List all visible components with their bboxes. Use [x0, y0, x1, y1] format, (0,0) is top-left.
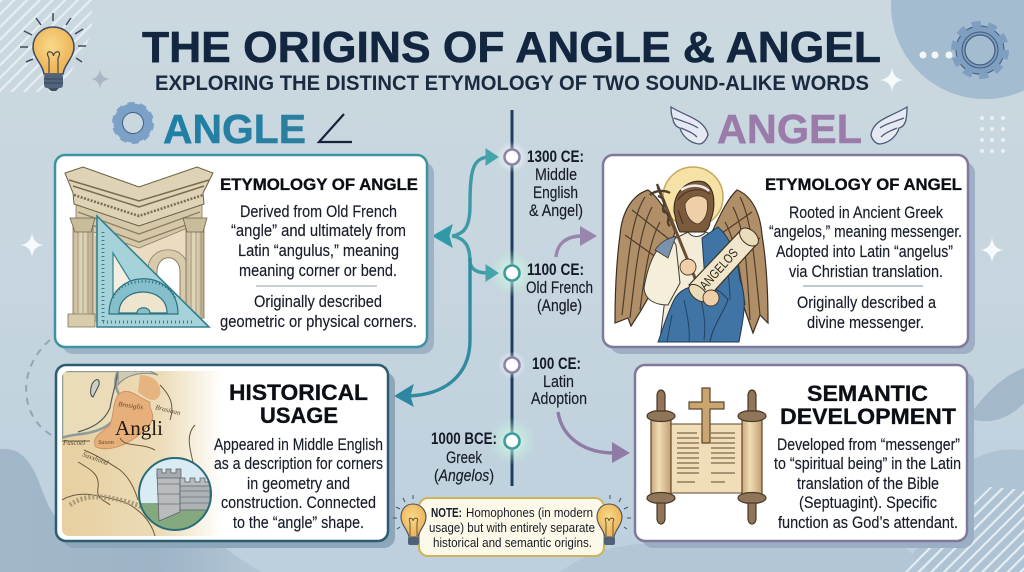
illustration: old map of Angli — [62, 371, 222, 536]
heading: historical usage: USAGE — [260, 403, 338, 428]
title: THE ORIGINS OF ANGLE & ANGEL — [142, 23, 881, 72]
icon: left note bulb — [393, 495, 426, 545]
icon: light bulb top left — [20, 13, 86, 91]
timeline label: 1300 CE: Middle — [535, 166, 577, 184]
text: historical description: construction. Connected — [221, 494, 376, 512]
text: historical description — [214, 436, 383, 532]
arrows: teal branch from timeline to angle cards — [395, 149, 498, 406]
arrow: purple to angel etymology card — [556, 226, 597, 257]
illustration: set square and protractor — [97, 216, 209, 327]
text: semantic description: Developed from “messenger” — [777, 436, 960, 454]
timeline label: 1300 CE: 1300 CE: — [527, 148, 584, 166]
note text: Homophones (in modern — [466, 506, 593, 520]
illustration: angel with scroll — [615, 167, 768, 342]
text: historical description: as a description for corners — [214, 455, 383, 473]
text: historical description: in geometry and — [247, 475, 350, 493]
timeline label: 1100 CE: (Angle) — [537, 297, 582, 315]
text: semantic description: function as God’s attendant. — [778, 514, 958, 532]
text: angel description: “angelos,” meaning messenger. — [769, 223, 962, 241]
text: angle description: geometric or physical corners. — [220, 313, 417, 331]
text: semantic description: to “spiritual being” in the Latin — [774, 455, 961, 473]
heading: semantic development — [780, 381, 957, 429]
note text: NOTE: — [431, 506, 462, 520]
text: angel description: Rooted in Ancient Greek — [789, 204, 944, 222]
heading: historical usage — [229, 380, 368, 428]
node: 100 CE — [498, 351, 526, 379]
text: historical description: Appeared in Middle English — [214, 436, 383, 454]
timeline label: 1100 CE: 1100 CE: — [527, 261, 584, 279]
text: angle description: Derived from Old French — [240, 203, 397, 221]
note text: usage) but with entirely separate — [429, 521, 595, 535]
node: 1100 CE — [488, 249, 536, 297]
timeline label: 1000 BCE — [431, 430, 497, 485]
panel: historical usage — [56, 365, 395, 548]
text: semantic description — [774, 436, 961, 532]
illustration: old map of Angli: Brosiglis — [118, 400, 144, 412]
text: historical description: to the “angle” shape. — [233, 514, 364, 532]
illustration: old map of Angli: Saxon — [98, 439, 114, 446]
arrow: purple to semantic development card — [558, 412, 630, 463]
heading: etymology of angel: ETYMOLOGY OF ANGEL — [765, 175, 962, 194]
icon: angle symbol — [319, 114, 352, 142]
timeline label: 100 CE: Latin — [543, 373, 574, 391]
text: semantic description: (Septuagint). Specific — [799, 494, 937, 512]
text: angel description: Adopted into Latin “angelus” — [776, 243, 953, 261]
icon: right note bulb — [597, 495, 631, 545]
text: angel description: divine messenger. — [807, 314, 924, 332]
note text: historical and semantic origins. — [433, 536, 592, 550]
label: Angli: Angli — [115, 416, 163, 440]
decorative dots beside gear — [920, 52, 952, 58]
text: angle description: Originally described — [254, 293, 382, 311]
illustration: classical temple corner — [65, 167, 213, 327]
text: angle description — [220, 203, 417, 331]
icon: blue gear by angle heading — [114, 104, 152, 142]
timeline — [488, 110, 536, 486]
text: angle description: Latin “angulus,” meaning — [238, 242, 399, 260]
node: 1300 CE — [496, 141, 528, 173]
timeline label: 1000 BCE: 1000 BCE: — [431, 430, 497, 448]
icon: left wing — [671, 107, 708, 144]
heading: semantic development: SEMANTIC — [807, 381, 928, 406]
timeline label: 1000 BCE: Greek — [446, 449, 483, 467]
text: angel description: via Christian translation. — [789, 263, 943, 281]
timeline label: 1000 BCE: (Angelos) — [434, 467, 494, 485]
text: angel description: Originally described a — [797, 294, 937, 312]
note text — [429, 506, 595, 550]
text: angel description — [769, 204, 962, 332]
timeline label: 1300 CE: & Angel) — [529, 202, 583, 220]
timeline label: 1100 CE — [526, 261, 593, 315]
heading: ANGEL: ANGEL — [717, 106, 862, 152]
timeline label: 1100 CE: Old French — [526, 279, 593, 297]
note callout — [419, 498, 604, 556]
icon: gear top right — [954, 24, 1006, 76]
panel: semantic development — [635, 365, 974, 548]
illustration: scroll with cross — [647, 388, 766, 524]
timeline label: 100 CE: Adoption — [531, 390, 587, 408]
heading: etymology of angle: ETYMOLOGY OF ANGLE — [220, 175, 418, 194]
subtitle: EXPLORING THE DISTINCT ETYMOLOGY OF TWO SOUND-ALIKE WORDS — [155, 72, 869, 95]
heading: semantic development: DEVELOPMENT — [780, 404, 957, 429]
label: ANGELOS on scroll: ANGELOS — [696, 245, 741, 293]
text: semantic description: translation of the Bible — [797, 475, 939, 493]
timeline label: 1300 CE: English — [533, 184, 578, 202]
text: angle description: “angle” and ultimately from — [231, 222, 406, 240]
illustration: old map of Angli: Brasiaan — [155, 403, 182, 417]
heading: historical usage: HISTORICAL — [229, 380, 368, 405]
text: angle description: meaning corner or bend. — [239, 262, 397, 280]
panel: etymology of angel — [603, 155, 975, 354]
timeline label: 100 CE: 100 CE: — [532, 355, 581, 373]
illustration: old map of Angli: Fuscoel — [62, 439, 85, 447]
timeline label: 100 CE — [531, 355, 587, 408]
timeline label: 1300 CE — [527, 148, 584, 220]
icon: right wing — [871, 107, 907, 144]
heading: ANGLE: ANGLE — [163, 106, 306, 152]
illustration: old map of Angli: Saxshood — [81, 450, 110, 467]
icon: castle in circle — [138, 457, 212, 531]
panel: etymology of angle — [55, 155, 434, 354]
node: 1000 BCE — [488, 417, 536, 465]
